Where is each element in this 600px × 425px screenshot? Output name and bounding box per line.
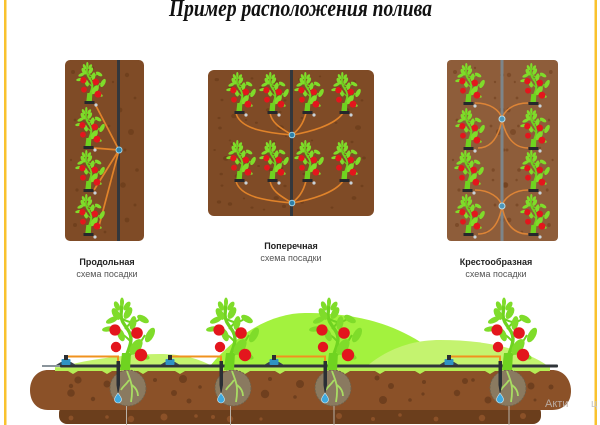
orange feeder lines (475, 103, 528, 234)
grass scallops (55, 368, 550, 374)
label: longitudinal: Продольная (79, 257, 135, 267)
label: cross: Крестообразная (460, 257, 532, 267)
label: transverse (260, 241, 322, 263)
irrigation pipe (42, 364, 558, 368)
tomato plants (454, 63, 551, 239)
tomato plants (75, 62, 107, 239)
tomato plants (226, 72, 362, 185)
main pipe (117, 60, 120, 241)
label: cross: схема посадки (465, 269, 527, 279)
tomato plants (102, 298, 539, 370)
thin gray lines (126, 406, 509, 425)
upper soil layer (30, 370, 571, 410)
label: longitudinal: схема посадки (76, 269, 138, 279)
main pipe (290, 70, 293, 216)
garden cross-section illustration (30, 298, 571, 425)
panel: longitudinal scheme (65, 60, 144, 241)
label: longitudinal (76, 257, 138, 279)
emitters (56, 355, 459, 365)
green hills (55, 313, 550, 371)
orange feeder lines (236, 113, 343, 203)
connectors (499, 116, 505, 209)
water drops (114, 393, 504, 403)
label: transverse: схема посадки (260, 253, 322, 263)
drip stakes (116, 361, 502, 395)
lower soil layer (59, 405, 541, 424)
left yellow border (4, 0, 6, 425)
connector (116, 147, 122, 153)
orange drip lines (68, 356, 500, 361)
watermark fragment: ц (591, 398, 598, 410)
connectors (289, 132, 295, 206)
label: cross (460, 257, 532, 279)
watermark text: Акти (545, 398, 568, 410)
right yellow border (594, 0, 597, 425)
root balls (110, 370, 526, 406)
panel: transverse scheme (208, 70, 374, 216)
panel: cross scheme (447, 60, 558, 241)
label: transverse: Поперечная (264, 241, 318, 251)
roots (121, 371, 518, 402)
main pipe (500, 60, 504, 241)
orange feeder lines (94, 104, 119, 226)
